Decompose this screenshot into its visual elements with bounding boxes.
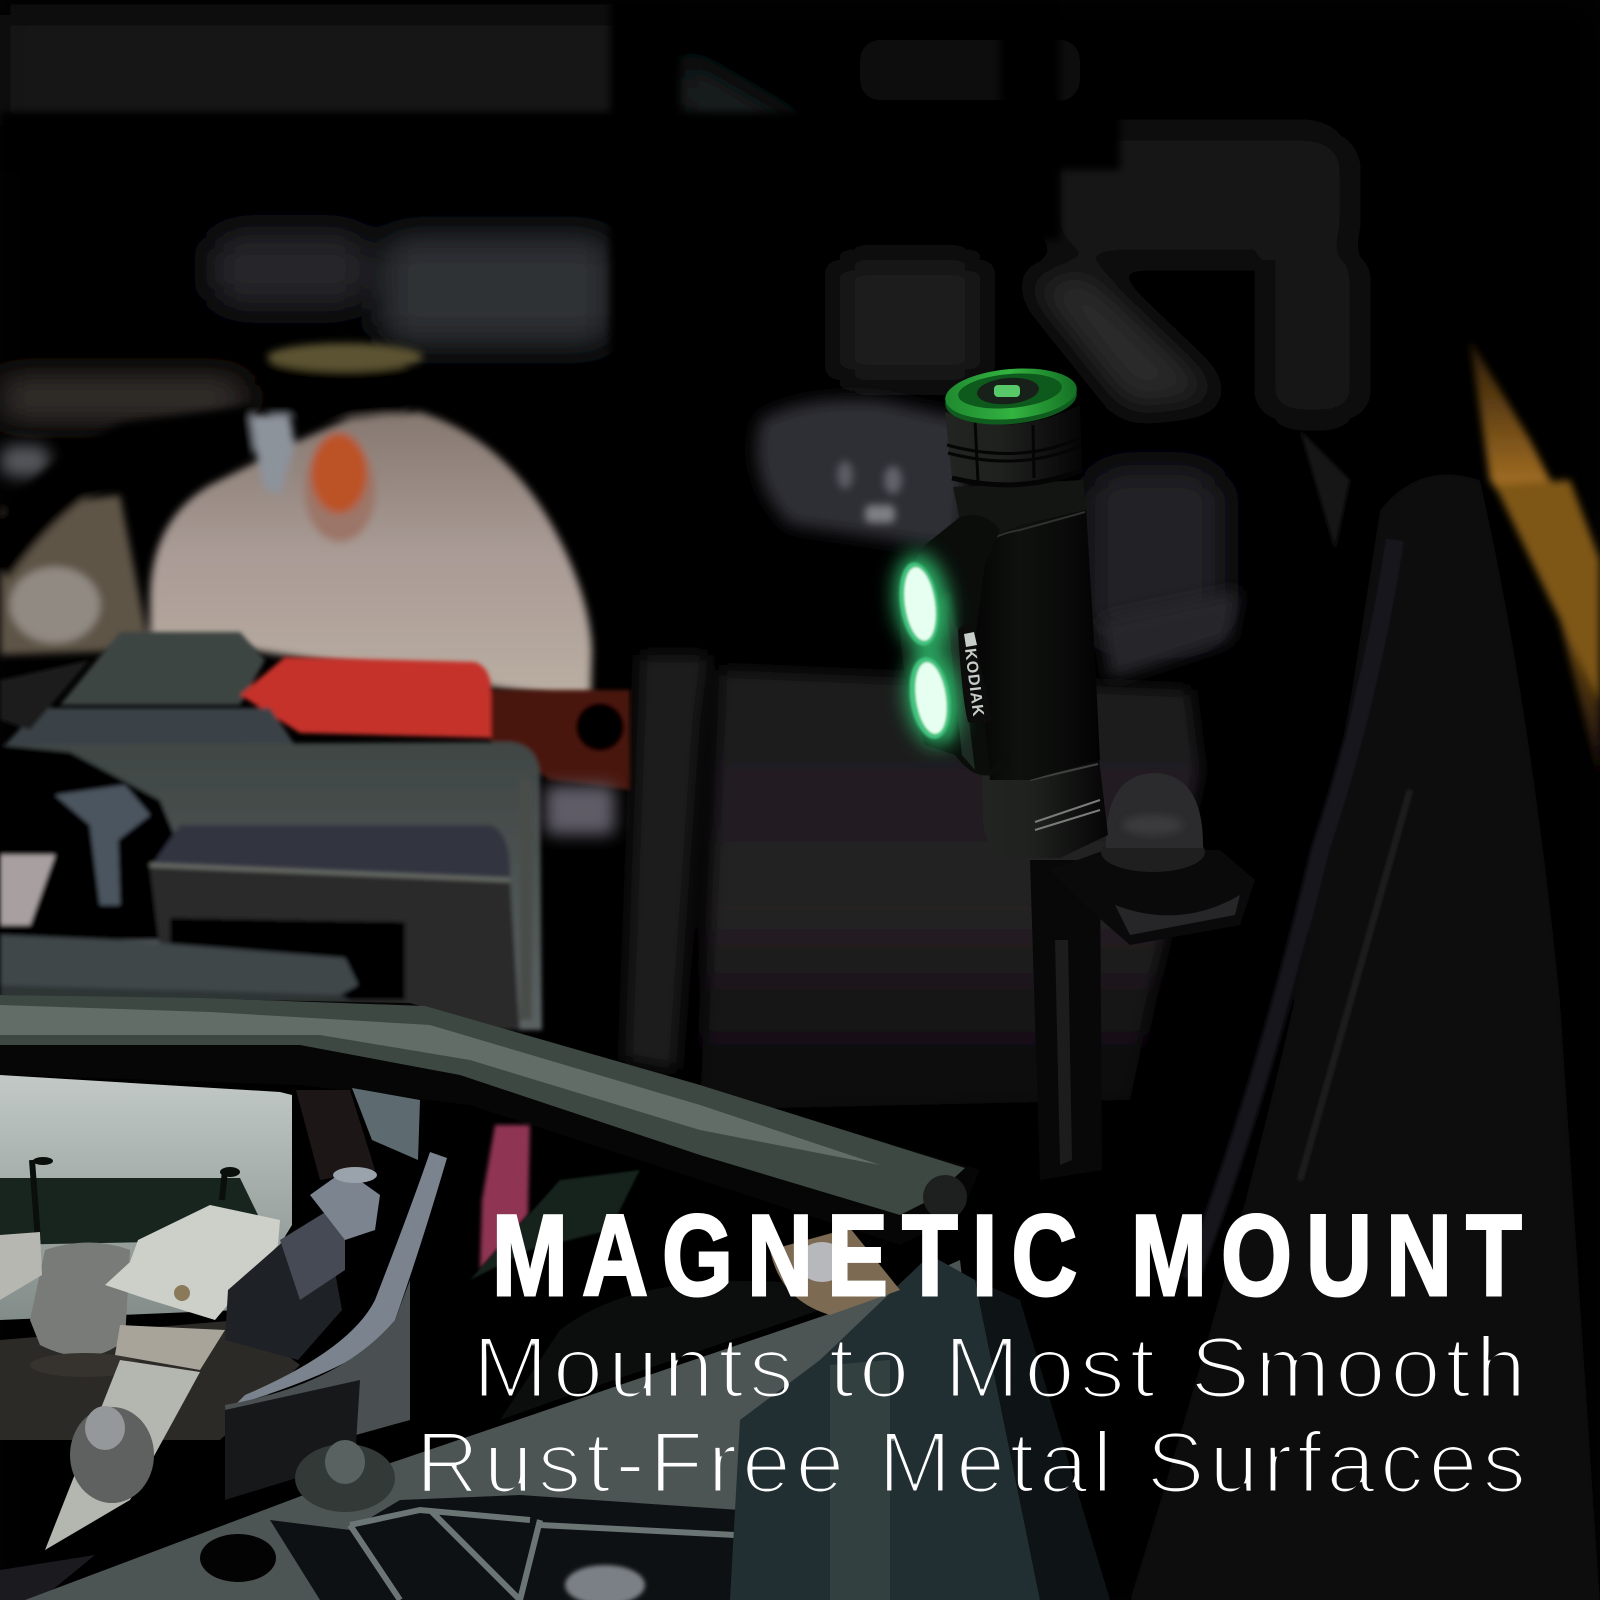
green bezel cap xyxy=(943,363,1079,430)
head ribbed ring xyxy=(945,405,1082,485)
black hose xyxy=(0,428,255,565)
lower lens xyxy=(904,655,956,741)
neck xyxy=(953,480,1086,540)
dark structural bars xyxy=(0,0,1120,470)
pink wire loom xyxy=(480,1125,530,1270)
foreground diagonal bracket xyxy=(25,1228,1110,1600)
orange sight mark xyxy=(304,433,376,542)
teal upright panel xyxy=(730,1255,1040,1600)
curved plastic guard xyxy=(235,1152,447,1405)
upper lens xyxy=(894,560,944,648)
brand badge xyxy=(958,625,992,724)
battery recess band xyxy=(150,825,510,880)
round hole xyxy=(200,1534,276,1582)
brass fixing washer xyxy=(770,1228,900,1315)
brand badge: KODIAK xyxy=(961,647,986,718)
lens glow halos xyxy=(889,550,965,749)
foreground steel rail xyxy=(0,995,980,1245)
torch mounting post and stopper xyxy=(1030,773,1255,1180)
battery top xyxy=(0,742,542,1030)
terminal post xyxy=(30,1242,130,1356)
hex bolt xyxy=(70,1406,154,1503)
paper label xyxy=(0,855,55,925)
caption line one: Mounts to Most Smooth xyxy=(473,1320,1531,1416)
right: rubber weather seal xyxy=(1130,430,1600,1600)
grey clip xyxy=(250,415,295,495)
coolant tank xyxy=(0,343,592,725)
battery and red terminal cover xyxy=(0,632,630,1030)
lower plastic strip xyxy=(0,935,358,995)
tail cylinder xyxy=(982,750,1108,858)
lower left: terminal box and hardware xyxy=(0,1075,640,1600)
caption line two: Rust-Free Metal Surfaces xyxy=(416,1415,1531,1511)
central dark panel xyxy=(625,655,1200,1110)
dark strut and grey block behind connector xyxy=(296,1088,420,1180)
background: headlamp housing behind torch xyxy=(0,399,1240,680)
battery slot xyxy=(170,918,405,1000)
background: highlights on blurred housing xyxy=(837,461,902,523)
lilac blurred reflection beside battery xyxy=(545,785,615,835)
flashlight xyxy=(889,363,1108,858)
white bus bar xyxy=(0,1232,42,1300)
right: hood edge gold reflection xyxy=(1470,340,1600,780)
connector plug xyxy=(225,1167,380,1360)
lens housing xyxy=(900,515,1010,775)
plastic clip xyxy=(55,785,150,905)
tank cap xyxy=(267,343,423,415)
battery front face xyxy=(150,868,520,1030)
main body xyxy=(975,507,1100,780)
glowing button logo xyxy=(994,385,1020,397)
bracket bolt xyxy=(295,1440,395,1512)
rubber stopper xyxy=(1101,773,1205,872)
